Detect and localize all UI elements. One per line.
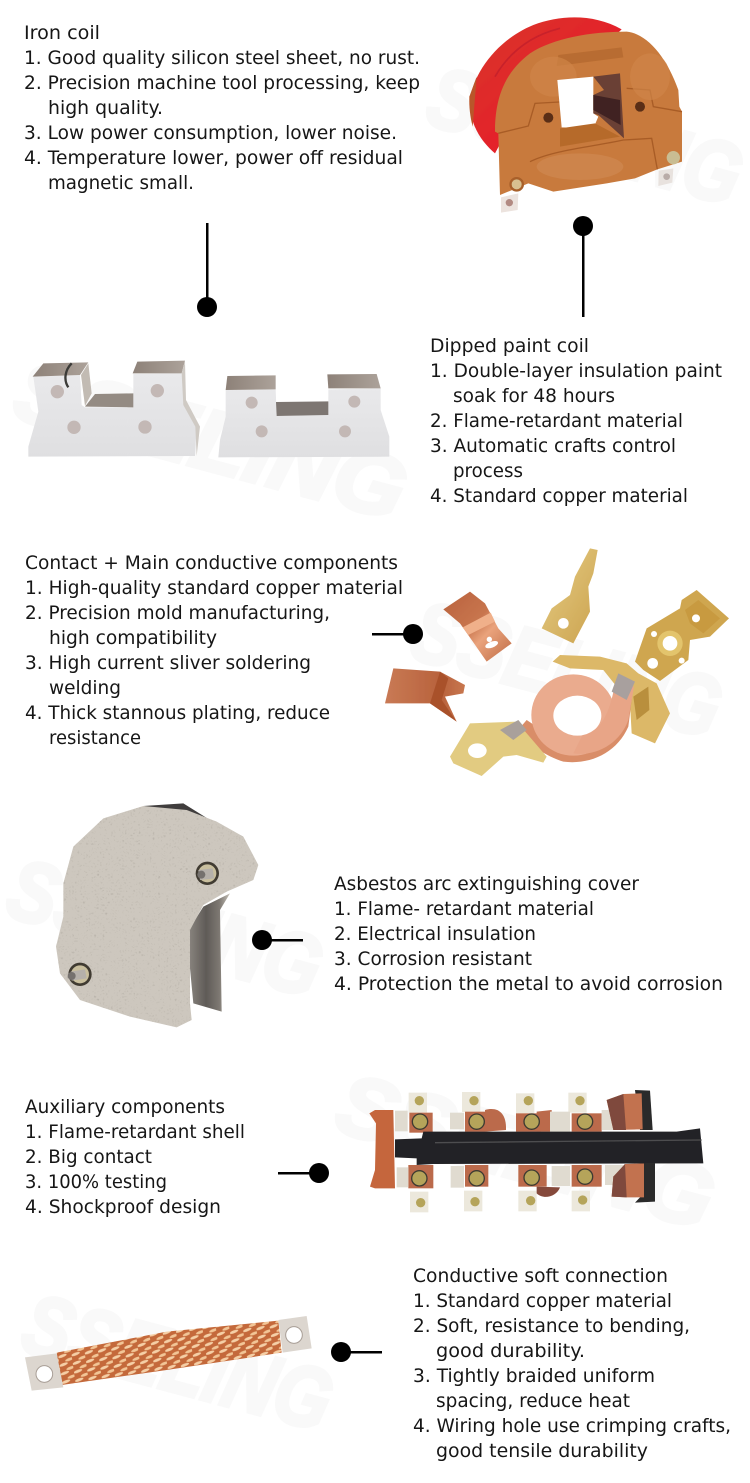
feature list: Iron coil: magnetic small. xyxy=(48,172,194,194)
nameplate xyxy=(557,47,623,66)
feature list: Contact: high compatibility xyxy=(49,627,217,649)
feature list: Asbestos cover: 1. Flame- retardant material xyxy=(334,898,594,920)
watermark: iron plates: SSELING xyxy=(5,343,416,539)
feature list: Conductive soft connection: good tensile durability xyxy=(436,1440,648,1462)
feature list: Auxiliary components: 4. Shockproof design xyxy=(25,1196,221,1218)
lower terminal tabs xyxy=(410,1191,590,1212)
feature list: Asbestos cover: 2. Electrical insulation xyxy=(334,923,536,945)
feature list: Dipped paint coil: 2. Flame-retardant material xyxy=(430,410,683,432)
feature list: Dipped paint coil xyxy=(430,360,722,507)
feature list: Conductive soft connection: good durability. xyxy=(436,1340,585,1362)
feature list: Contact xyxy=(25,577,403,749)
feature list: Dipped paint coil: 4. Standard copper material xyxy=(430,485,688,507)
watermark: auxiliary: SSELING xyxy=(327,1056,724,1248)
photo: iron core plates xyxy=(28,361,389,457)
feature list: Iron coil: 1. Good quality silicon steel sheet, no rust. xyxy=(24,47,420,69)
bolt upper xyxy=(196,862,219,885)
screws xyxy=(509,177,524,192)
feature list: Auxiliary components xyxy=(25,1121,245,1218)
copper coil ring xyxy=(517,674,634,762)
heading: Conductive soft connection: Conductive soft connection xyxy=(413,1265,668,1287)
right lug xyxy=(278,1316,312,1353)
heading: Asbestos arc extinguishing cover: Asbestos arc extinguishing cover xyxy=(334,873,639,895)
feature list: Conductive soft connection xyxy=(413,1290,731,1462)
rear black plate upper xyxy=(635,1090,653,1130)
text block: Contact + Main conductive components xyxy=(25,552,403,749)
feature list: Iron coil: high quality. xyxy=(48,97,163,119)
braid xyxy=(57,1321,282,1385)
orange end blocks xyxy=(369,1110,395,1188)
feature list: Auxiliary components: 1. Flame-retardant shell xyxy=(25,1121,245,1143)
cover inner slot xyxy=(187,893,230,1012)
terminals xyxy=(501,193,518,213)
feature list: Conductive soft connection: 4. Wiring hole use crimping crafts, xyxy=(413,1415,731,1437)
feature list: Contact: 4. Thick stannous plating, reduce xyxy=(25,702,330,724)
heading: Contact + Main conductive components: Contact + Main conductive components xyxy=(25,552,398,574)
left plate xyxy=(28,361,200,457)
brown contact mounts xyxy=(408,1109,602,1197)
connector: braided strap xyxy=(331,1342,382,1362)
feature list: Conductive soft connection: 1. Standard copper material xyxy=(413,1290,672,1312)
brass screws xyxy=(412,1096,593,1207)
watermark: arc cover: SSELING xyxy=(0,841,332,1016)
photo: dipped paint coil xyxy=(469,17,682,213)
heading: Iron coil: Iron coil xyxy=(24,22,100,44)
brass arm xyxy=(553,655,670,743)
feature list: Asbestos cover xyxy=(334,898,723,995)
window xyxy=(557,77,598,128)
cover body xyxy=(56,806,258,1027)
heading: Dipped paint coil: Dipped paint coil xyxy=(430,335,589,357)
connector: arc cover xyxy=(252,930,303,950)
text block: Dipped paint coil xyxy=(430,335,722,507)
left lug xyxy=(25,1353,63,1391)
mounting holes xyxy=(543,113,553,123)
feature list: Auxiliary components: 2. Big contact xyxy=(25,1146,152,1168)
text block: Conductive soft connection xyxy=(413,1265,731,1462)
brass terminal lower left xyxy=(450,722,547,776)
right plate xyxy=(218,374,389,457)
feature list: Asbestos cover: 4. Protection the metal to avoid corrosion xyxy=(334,973,723,995)
connector: auxiliary components xyxy=(278,1163,329,1183)
connector: contacts xyxy=(372,624,423,644)
feature list: Iron coil: 4. Temperature lower, power off residual xyxy=(24,147,403,169)
feature list: Asbestos cover: 3. Corrosion resistant xyxy=(334,948,532,970)
photo: copper and brass contacts xyxy=(385,548,729,776)
feature list: Contact: 3. High current sliver soldering xyxy=(25,652,311,674)
feature list: Auxiliary components: 3. 100% testing xyxy=(25,1171,167,1193)
copper bracket lower xyxy=(385,668,465,722)
feature list: Dipped paint coil: 1. Double-layer insulation paint xyxy=(430,360,722,382)
connector: dipped paint coil xyxy=(573,216,593,317)
rear black plate lower xyxy=(635,1163,655,1203)
feature list: Iron coil: 2. Precision machine tool processing, keep xyxy=(24,72,420,94)
silver solder joints xyxy=(612,673,635,700)
text block: Iron coil xyxy=(24,22,420,194)
brass plate right xyxy=(635,590,729,681)
upper terminal tabs xyxy=(409,1092,587,1113)
red winding xyxy=(470,17,622,153)
feature list: Contact: resistance xyxy=(49,727,141,749)
watermark: braid: SSELING xyxy=(13,1276,342,1450)
feature list: Conductive soft connection: spacing, reduce heat xyxy=(436,1390,630,1412)
feature list: Dipped paint coil: 3. Automatic crafts control xyxy=(430,435,676,457)
copper bracket upper xyxy=(443,592,512,662)
photo: arc extinguishing cover xyxy=(56,803,258,1027)
feature list: Iron coil xyxy=(24,47,420,194)
text block: Auxiliary components xyxy=(25,1096,245,1218)
text block: Asbestos arc extinguishing cover xyxy=(334,873,723,995)
feature list: Contact: welding xyxy=(49,677,121,699)
feature list: Iron coil: 3. Low power consumption, lower noise. xyxy=(24,122,397,144)
photo: braided copper strap xyxy=(25,1316,312,1391)
orange shell xyxy=(495,32,682,195)
white springs xyxy=(395,1110,623,1188)
black slider bar xyxy=(395,1128,703,1165)
photo: auxiliary contact block xyxy=(369,1090,703,1212)
feature list: Dipped paint coil: soak for 48 hours xyxy=(453,385,615,407)
feature list: Contact: 2. Precision mold manufacturing, xyxy=(25,602,330,624)
connector: iron coil xyxy=(197,223,217,317)
relief shading xyxy=(498,88,682,169)
feature list: Conductive soft connection: 3. Tightly braided uniform xyxy=(413,1365,655,1387)
feature list: Dipped paint coil: process xyxy=(453,460,523,482)
heading: Auxiliary components: Auxiliary components xyxy=(25,1096,225,1118)
feature list: Conductive soft connection: 2. Soft, resistance to bending, xyxy=(413,1315,690,1337)
brass lug top xyxy=(542,548,598,643)
top rim xyxy=(143,803,210,823)
bolt lower xyxy=(68,963,92,986)
feature list: Contact: 1. High-quality standard copper material xyxy=(25,577,403,599)
